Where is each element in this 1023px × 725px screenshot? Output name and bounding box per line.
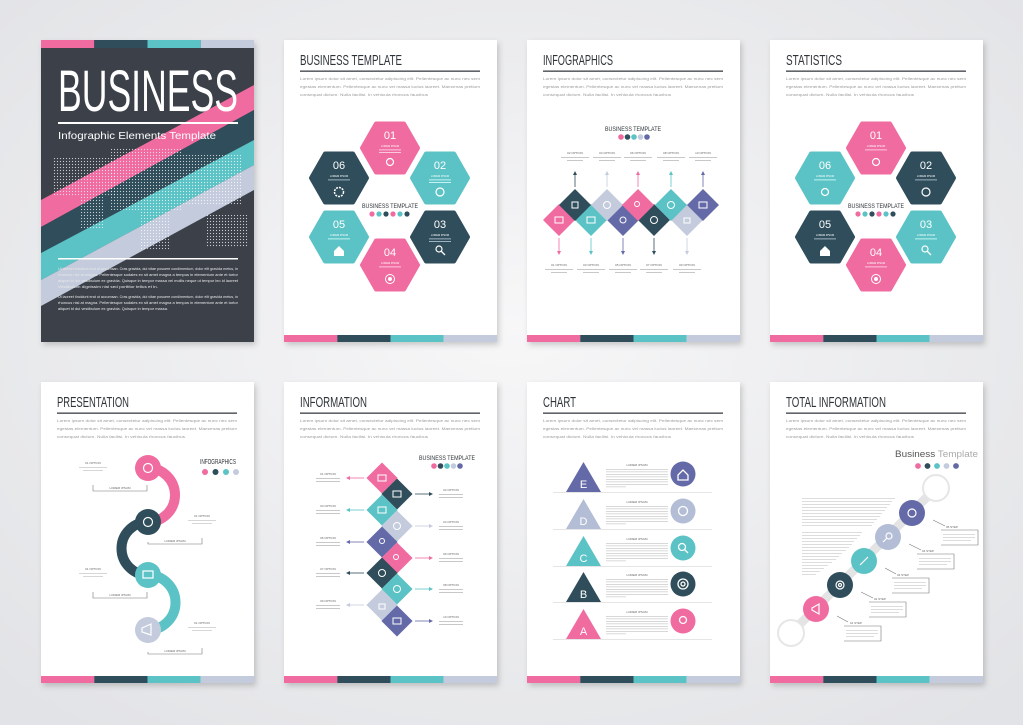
- hexagon 02: LOREM IPSUM: [431, 174, 449, 178]
- intro text: consequat dictum. Nulla facilisi. In vehicula rhoncus faucibus: [57, 435, 185, 439]
- step labels: 05 STEP: [946, 525, 958, 529]
- panel: chart: [527, 382, 740, 683]
- legend: BUSINESS TEMPLATE: [605, 126, 662, 133]
- panel: information: [284, 382, 497, 683]
- panel: cover business: [41, 40, 254, 342]
- legend: [200, 459, 239, 475]
- panel: presentation: [41, 382, 254, 683]
- triangle rows: LOREM IPSUM: [626, 463, 648, 467]
- cover body text: aliquet id dui vestibulum ex gravida. Quisque in tempor massa vel mollis neque ut tempor leo id laoreet: [58, 279, 238, 283]
- intro text: consequat dictum. Nulla facilisi. In vehicula rhoncus faucibus: [786, 435, 914, 439]
- hexagon 04: 04: [870, 247, 882, 259]
- hexagon 05: [797, 212, 853, 262]
- intro text: consequat dictum. Nulla facilisi. In vehicula rhoncus faucibus: [543, 435, 671, 439]
- intro text: Lorem ipsum dolor sit amet, consectetur adipiscing elit. Pellentesque ac nunc nec sem: [543, 419, 723, 423]
- hexagon 02: [412, 154, 468, 202]
- hexagon 04: [362, 240, 418, 290]
- hexagon 03: 03: [920, 219, 932, 231]
- center label: [362, 203, 419, 217]
- hexagon 02: 02: [434, 160, 446, 172]
- arrows and option labels: 06 OPTION: [443, 552, 459, 556]
- panel: business template hexagons: [284, 40, 497, 342]
- option labels: [79, 461, 216, 654]
- step labels: [837, 520, 978, 641]
- arrows and option labels: 10 OPTION: [443, 615, 459, 619]
- title: BUSINESS: BUSINESS: [58, 59, 238, 124]
- cover body text: Vestibulum dignissim nisl sed porttitor tellus et in.: [58, 285, 158, 289]
- hexagon 01: 01: [870, 130, 882, 142]
- intro text: Lorem ipsum dolor sit amet, consectetur adipiscing elit. Pellentesque ac nunc nec sem: [300, 419, 480, 423]
- cover body text: Ut laoreet tincidunt erat ut accumsan. Cras gravida, dui vitae posuere condimentum, dolor elit gravida metus, in: [58, 295, 238, 299]
- arrows and option labels: 08 OPTION: [663, 151, 679, 155]
- heading: PRESENTATION: [57, 394, 129, 411]
- hexagon 05: LOREM IPSUM: [816, 233, 834, 237]
- triangle rows: LOREM IPSUM: [626, 610, 648, 614]
- hexagon 05: LOREM IPSUM: [330, 233, 348, 237]
- vertical diamond chain: [366, 462, 413, 637]
- legend: [895, 449, 978, 469]
- heading: TOTAL INFORMATION: [786, 394, 886, 411]
- arrows and option labels: 08 OPTION: [443, 583, 459, 587]
- arrows and option labels: 05 OPTION: [615, 263, 631, 267]
- intro text: consequat dictum. Nulla facilisi. In vehicula rhoncus faucibus: [300, 435, 428, 439]
- intro text: [543, 77, 723, 97]
- cover body text: rhoncus nisi at magna. Pellentesque sodales ex sit amet magna a tempus in elementum ante et tortor: [58, 301, 239, 305]
- subtitle: Infographic Elements Template: [58, 131, 216, 142]
- triangle rows: LOREM IPSUM: [626, 500, 648, 504]
- intro text: consequat dictum. Nulla facilisi. In vehicula rhoncus faucibus: [786, 93, 914, 97]
- arrows and option labels: [316, 472, 463, 625]
- intro text: egestas elementum. Pellentesque ac nunc vel massa luctus laoreet. Maecenas pretium: [300, 85, 480, 89]
- hexagon 04: [848, 240, 904, 290]
- step labels: 02 STEP: [874, 597, 886, 601]
- hexagon 01: [848, 124, 904, 172]
- hexagon 05: [311, 212, 367, 262]
- step labels: 03 STEP: [897, 573, 909, 577]
- arrows and option labels: 07 OPTION: [646, 263, 662, 267]
- arrows and option labels: 09 OPTION: [679, 263, 695, 267]
- hexagon 04: LOREM IPSUM: [381, 261, 399, 265]
- arrows and option labels: 01 OPTION: [320, 472, 336, 476]
- triangle rows: E: [580, 479, 587, 491]
- hexagon 03: LOREM IPSUM: [917, 233, 935, 237]
- hexagon 01: LOREM IPSUM: [867, 144, 885, 148]
- triangle rows: D: [580, 516, 588, 528]
- hexagon 04: 04: [384, 247, 396, 259]
- step labels: 01 STEP: [850, 621, 862, 625]
- hexagon 03: LOREM IPSUM: [431, 233, 449, 237]
- option labels: LOREM IPSUM: [164, 649, 186, 653]
- panel: statistics hexagons: [770, 40, 983, 342]
- hexagon 06: [797, 154, 853, 202]
- triangle rows: LOREM IPSUM: [626, 573, 648, 577]
- option labels: 01 OPTION: [194, 621, 210, 625]
- side text block: [802, 498, 895, 575]
- hexagon 01: [362, 124, 418, 172]
- intro text: consequat dictum. Nulla facilisi. In vehicula rhoncus faucibus: [300, 93, 428, 97]
- intro text: [300, 419, 480, 439]
- step labels: 04 STEP: [922, 549, 934, 553]
- cover body text: rhoncus nisi at magna. Pellentesque sodales ex sit amet magna a tempus in elementum ante et tortor: [58, 273, 239, 277]
- option labels: 01 OPTION: [85, 461, 101, 465]
- world map dots: [53, 148, 248, 250]
- arrows and option labels: 07 OPTION: [320, 567, 336, 571]
- option labels: LOREM IPSUM: [164, 539, 186, 543]
- arrows and option labels: 02 OPTION: [567, 151, 583, 155]
- hexagon 05: 05: [333, 219, 345, 231]
- triangle rows: LOREM IPSUM: [626, 537, 648, 541]
- hexagon 05: 05: [819, 219, 831, 231]
- heading: INFOGRAPHICS: [543, 52, 613, 69]
- cover body text: aliquet id dui vestibulum ex gravida. Quisque in tempor massa.: [58, 307, 168, 311]
- cover body text: [58, 267, 239, 311]
- legend: [605, 126, 662, 140]
- hexagon 06: 06: [333, 160, 345, 172]
- option labels: LOREM IPSUM: [109, 593, 131, 597]
- center label: [848, 203, 905, 217]
- intro text: [786, 77, 966, 97]
- triangle rows: B: [580, 589, 587, 601]
- heading: INFORMATION: [300, 394, 367, 411]
- heading: CHART: [543, 394, 576, 411]
- hexagon 06: 06: [819, 160, 831, 172]
- arrows and option labels: 10 OPTION: [695, 151, 711, 155]
- hexagon 04: LOREM IPSUM: [867, 261, 885, 265]
- arrows and option labels: 09 OPTION: [320, 599, 336, 603]
- hexagon 06: LOREM IPSUM: [816, 174, 834, 178]
- triangle rows: A: [580, 626, 588, 638]
- legend: [419, 455, 476, 469]
- hexagon 01: 01: [384, 130, 396, 142]
- intro text: egestas elementum. Pellentesque ac nunc vel massa luctus laoreet. Maecenas pretium: [543, 85, 723, 89]
- arrows and option labels: 04 OPTION: [443, 520, 459, 524]
- intro text: Lorem ipsum dolor sit amet, consectetur adipiscing elit. Pellentesque ac nunc nec sem: [543, 77, 723, 81]
- option labels: LOREM IPSUM: [109, 486, 131, 490]
- legend: Business Template: [895, 449, 978, 459]
- panel: total information: [770, 382, 983, 683]
- hexagon 03: [898, 212, 954, 262]
- intro text: [786, 419, 966, 439]
- triangle rows: C: [580, 553, 588, 565]
- s-curve timeline: [122, 455, 176, 643]
- diamond chain: [543, 189, 719, 236]
- hexagon 01: LOREM IPSUM: [381, 144, 399, 148]
- hexagon 03: 03: [434, 219, 446, 231]
- intro text: Lorem ipsum dolor sit amet, consectetur adipiscing elit. Pellentesque ac nunc nec sem: [786, 77, 966, 81]
- legend: BUSINESS TEMPLATE: [419, 455, 476, 462]
- hexagon 06: [311, 154, 367, 202]
- option labels: 01 OPTION: [85, 567, 101, 571]
- arrows and option labels: 01 OPTION: [551, 263, 567, 267]
- legend: INFOGRAPHICS: [200, 459, 236, 466]
- intro text: egestas elementum. Pellentesque ac nunc vel massa luctus laoreet. Maecenas pretium: [786, 85, 966, 89]
- arrows and option labels: 04 OPTION: [599, 151, 615, 155]
- heading: STATISTICS: [786, 52, 842, 69]
- cover body text: Ut laoreet tincidunt erat ut accumsan. Cras gravida, dui vitae posuere condimentum, dolor elit gravida metus, in: [58, 267, 238, 271]
- hexagon 02: [898, 154, 954, 202]
- panel: infographics diamonds: [527, 40, 740, 342]
- intro text: egestas elementum. Pellentesque ac nunc vel massa luctus laoreet. Maecenas pretium: [543, 427, 723, 431]
- intro text: [543, 419, 723, 439]
- arrows and option labels: 06 OPTION: [630, 151, 646, 155]
- hexagon 03: [412, 212, 468, 262]
- intro text: Lorem ipsum dolor sit amet, consectetur adipiscing elit. Pellentesque ac nunc nec sem: [786, 419, 966, 423]
- intro text: [300, 77, 480, 97]
- intro text: Lorem ipsum dolor sit amet, consectetur adipiscing elit. Pellentesque ac nunc nec sem: [300, 77, 480, 81]
- hexagon 02: 02: [920, 160, 932, 172]
- hexagon 02: LOREM IPSUM: [917, 174, 935, 178]
- intro text: egestas elementum. Pellentesque ac nunc vel massa luctus laoreet. Maecenas pretium: [786, 427, 966, 431]
- option labels: 01 OPTION: [194, 514, 210, 518]
- arrows and option labels: 03 OPTION: [320, 504, 336, 508]
- arrows and option labels: 03 OPTION: [583, 263, 599, 267]
- arrows and option labels: [545, 151, 717, 273]
- arrows and option labels: 05 OPTION: [320, 536, 336, 540]
- hexagon 06: LOREM IPSUM: [330, 174, 348, 178]
- intro text: egestas elementum. Pellentesque ac nunc vel massa luctus laoreet. Maecenas pretium: [57, 427, 237, 431]
- center label: BUSINESS TEMPLATE: [848, 203, 905, 210]
- intro text: consequat dictum. Nulla facilisi. In vehicula rhoncus faucibus: [543, 93, 671, 97]
- step diagonal: [778, 475, 949, 646]
- intro text: [57, 419, 237, 439]
- center label: BUSINESS TEMPLATE: [362, 203, 419, 210]
- intro text: egestas elementum. Pellentesque ac nunc vel massa luctus laoreet. Maecenas pretium: [300, 427, 480, 431]
- intro text: Lorem ipsum dolor sit amet, consectetur adipiscing elit. Pellentesque ac nunc nec sem: [57, 419, 237, 423]
- heading: BUSINESS TEMPLATE: [300, 52, 402, 69]
- arrows and option labels: 02 OPTION: [443, 488, 459, 492]
- triangle rows: [553, 462, 712, 640]
